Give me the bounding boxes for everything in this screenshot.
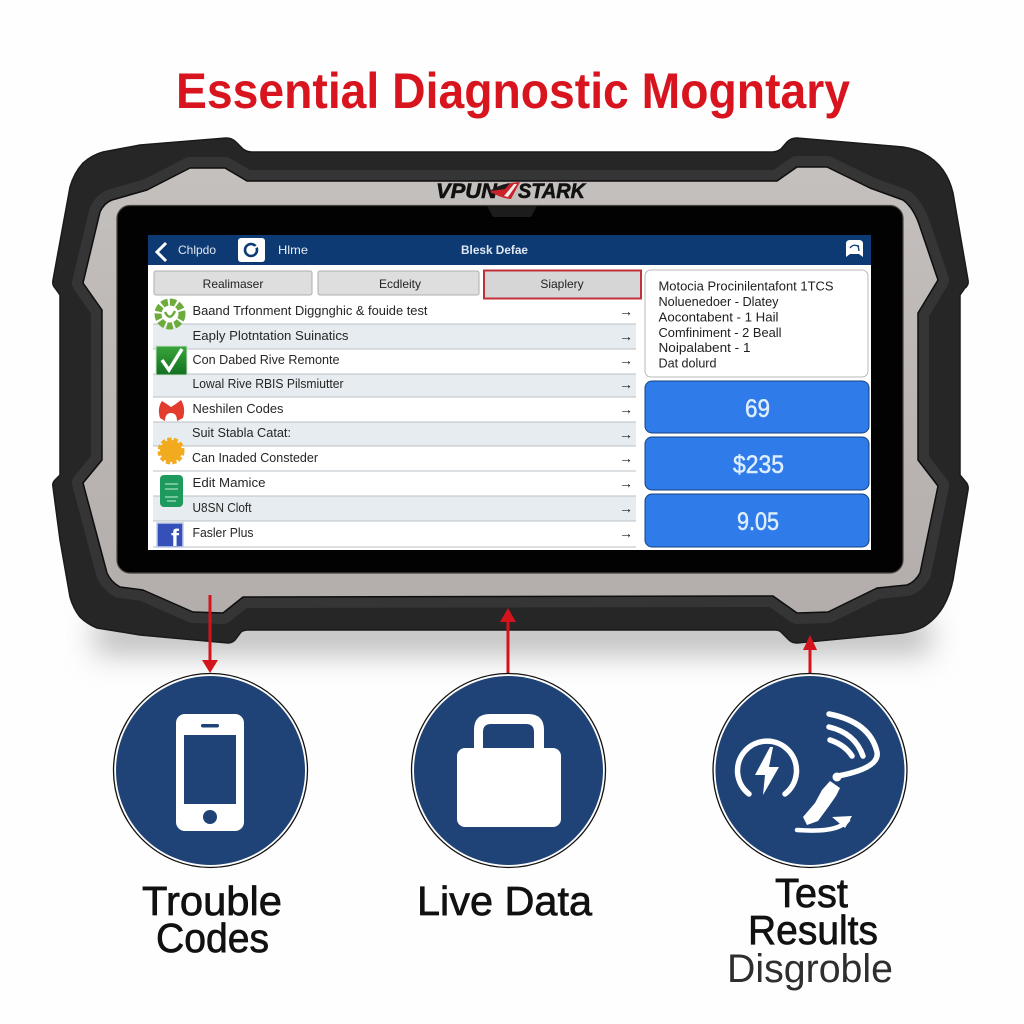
menu list: → — [619, 525, 633, 541]
icon: green check — [156, 346, 187, 375]
badge: live data lock — [412, 674, 606, 868]
header bar: Blesk Defae — [461, 243, 528, 257]
label: test results: Results — [748, 907, 878, 953]
tabs: Siaplery — [540, 277, 584, 291]
label: trouble codes: Trouble — [142, 878, 282, 924]
icon: green tablet — [160, 475, 183, 507]
info panel — [645, 270, 868, 377]
label: test results — [748, 870, 878, 953]
label: disgroble: Disgroble — [727, 947, 893, 991]
menu list: Suit Stabla Catat: — [192, 426, 291, 440]
device shadow — [95, 618, 930, 654]
menu list: Neshilen Codes — [192, 402, 284, 416]
badge: test results tools — [713, 674, 907, 868]
header bar: Hlme — [278, 243, 308, 257]
brand logo — [436, 180, 587, 203]
value button: 69 — [645, 381, 869, 433]
label: trouble codes: Codes — [156, 915, 269, 961]
menu list: → — [619, 352, 633, 368]
menu list: Con Dabed Rive Remonte — [192, 353, 340, 367]
menu list: → — [619, 475, 633, 491]
menu list — [153, 303, 636, 547]
header bar — [148, 235, 871, 265]
menu list: Edit Mamice — [192, 476, 266, 490]
camera notch — [487, 206, 537, 217]
arrow: left pointing down — [202, 595, 218, 673]
icon: red shield — [159, 400, 184, 421]
icon: padlock — [457, 714, 561, 827]
info panel: Comfiniment - 2 Beall — [658, 326, 782, 340]
grey bezel — [83, 167, 938, 613]
tabs: Realimaser — [203, 277, 263, 291]
menu list: → — [619, 426, 633, 442]
brand logo: VPUN — [436, 180, 498, 203]
menu list: → — [619, 401, 633, 417]
menu list: Eaply Plotntation Suinatics — [192, 329, 348, 343]
scan tool device — [53, 138, 968, 643]
rubber housing — [53, 138, 968, 643]
display background — [148, 235, 871, 550]
icon: power gauge — [738, 741, 797, 795]
badge: trouble codes phone — [114, 674, 308, 868]
menu list: → — [619, 500, 633, 516]
display — [148, 235, 871, 552]
value button: 9.05 — [645, 494, 869, 547]
menu list: Fasler Plus — [192, 526, 254, 540]
tabs: Ecdleity — [379, 277, 421, 291]
info panel: Noluenedoer - Dlatey — [658, 295, 779, 309]
info panel: Aocontabent - 1 Hail — [658, 310, 778, 324]
label: live data: Live Data — [417, 878, 592, 924]
menu list: → — [619, 303, 633, 319]
label: trouble codes — [142, 878, 282, 961]
value button: $235: $235 — [733, 451, 784, 479]
value button: $235 — [645, 437, 869, 490]
icon: green gear — [158, 302, 182, 326]
menu list: Baand Trfonment Diggnghic & fouide test — [192, 304, 428, 318]
housing inner grip band — [83, 167, 938, 613]
info panel: Motocia Procinilentafont 1TCS — [658, 280, 834, 294]
header bar: Chlpdo — [178, 243, 216, 257]
icon: wireless probe — [797, 714, 877, 831]
info panel: Dat dolurd — [658, 356, 717, 370]
icon: phone — [176, 714, 244, 831]
tabs — [154, 270, 641, 298]
menu list: → — [619, 450, 633, 466]
info panel: Noipalabent - 1 — [658, 341, 751, 355]
menu list: Can Inaded Consteder — [192, 451, 318, 465]
brand logo: STARK — [518, 180, 587, 203]
screen frame — [117, 206, 903, 573]
icon: blue f square — [157, 523, 183, 552]
label: test results: Test — [775, 870, 849, 916]
menu list: Lowal Rive RBIS Pilsmiutter — [192, 377, 344, 391]
menu list: → — [619, 376, 633, 392]
icon: yellow sun — [160, 440, 182, 462]
icon: blue f square: f — [171, 525, 180, 552]
value button: 69: 69 — [745, 395, 770, 423]
menu list: → — [619, 328, 633, 344]
value button: 9.05: 9.05 — [737, 508, 779, 536]
title: Essential Diagnostic Mogntary — [176, 63, 850, 119]
arrow: right pointing up — [803, 635, 817, 673]
arrow: middle pointing up — [500, 608, 516, 673]
menu list: U8SN Cloft — [192, 501, 252, 515]
